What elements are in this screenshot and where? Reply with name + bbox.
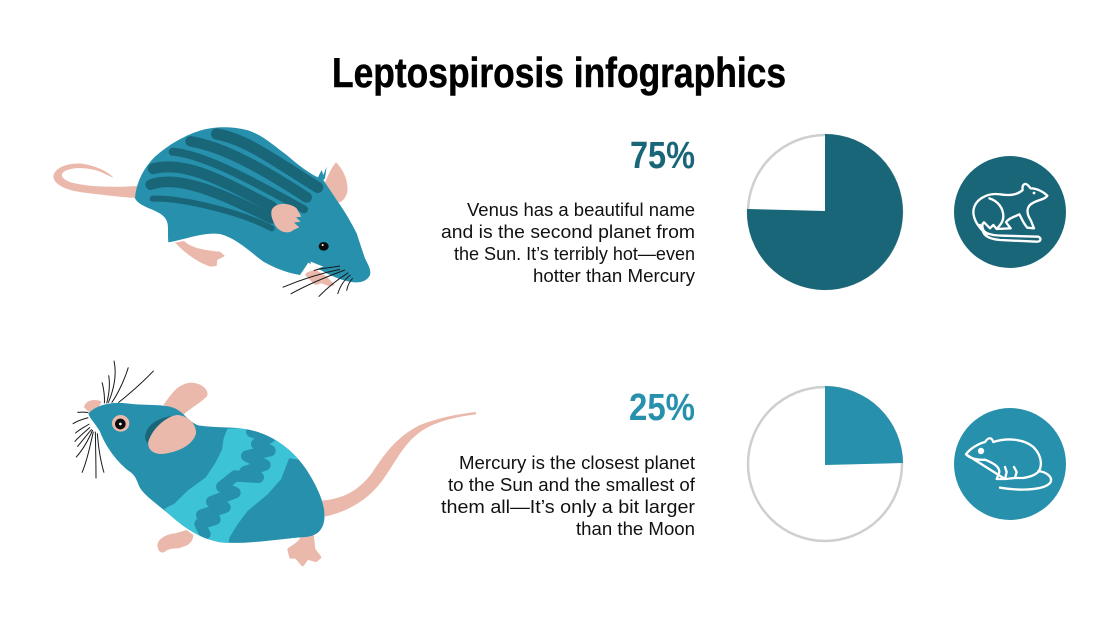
text block: Venus: hotter than Mercury (533, 266, 695, 286)
text block: Mercury: to the Sun and the smallest of (448, 475, 696, 495)
text block: Venus: Venus has a beautiful name (467, 200, 695, 220)
text block: Venus: the Sun. It’s terribly hot—even (454, 244, 695, 264)
text block: Venus (441, 200, 695, 286)
text block: Mercury: them all—It’s only a bit larger (441, 497, 695, 517)
text block: Mercury: Mercury is the closest planet (459, 453, 695, 473)
icon: rat in dark circle (954, 156, 1066, 268)
text block: Mercury: than the Moon (576, 519, 695, 539)
text block: Venus: and is the second planet from (441, 222, 695, 242)
pie chart: 75% (747, 134, 903, 290)
stat: 75%: 75% (630, 135, 695, 177)
title: Leptospirosis infographics (332, 49, 786, 96)
stat: 25%: 25% (629, 387, 695, 429)
text block: Mercury (441, 453, 696, 539)
illustration: banded mouse (73, 361, 476, 565)
pie chart: 25% (748, 386, 903, 541)
illustration: striped rat (53, 127, 370, 297)
icon: mouse in blue circle (954, 408, 1066, 520)
